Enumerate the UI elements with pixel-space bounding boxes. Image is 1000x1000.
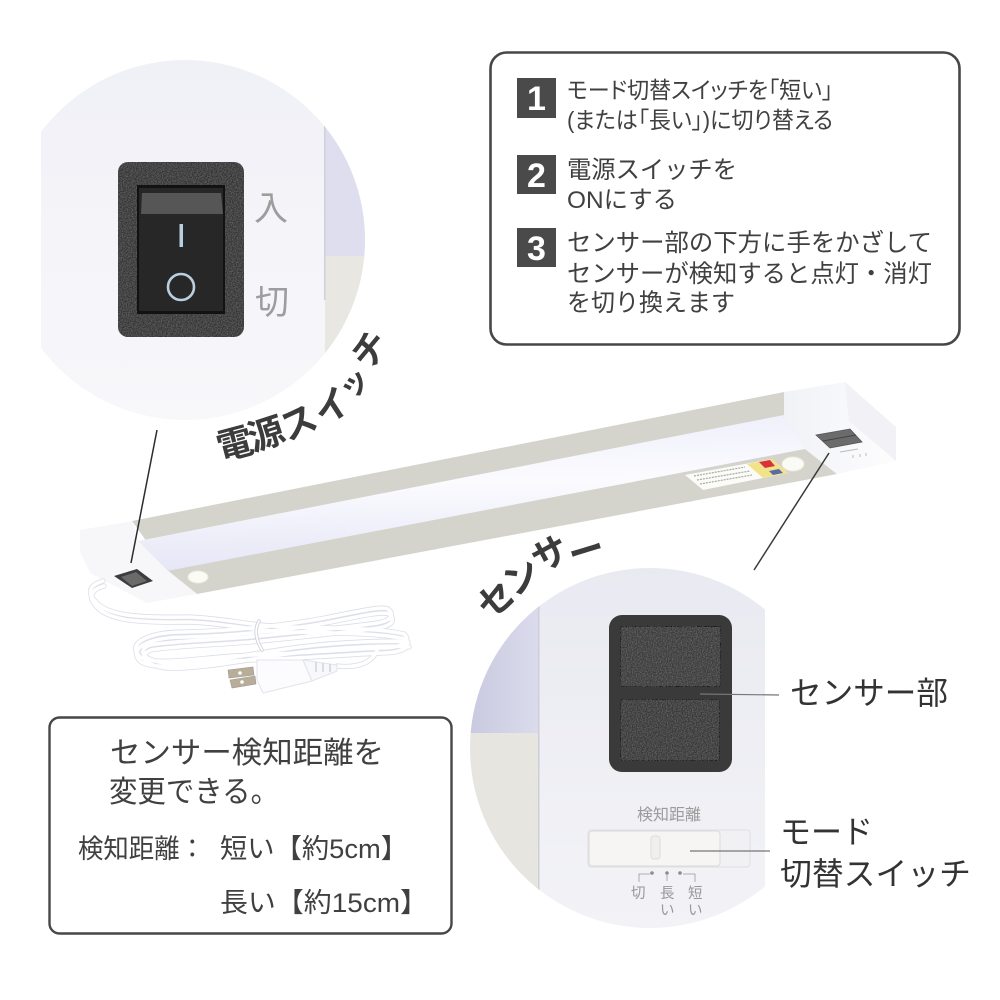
step 2 text: 電源スイッチを xyxy=(567,156,737,184)
bar diffuser xyxy=(138,415,805,571)
bar left end cap xyxy=(80,521,197,603)
heading: power switch, arched: 電 xyxy=(212,419,257,468)
step 1 text xyxy=(567,77,833,133)
heading: power switch, arched xyxy=(212,323,398,468)
LED bar light product xyxy=(80,382,896,693)
switch label: on: 入 xyxy=(254,190,288,228)
label: sensor part: センサー部 xyxy=(790,675,948,711)
panel: detection distance note xyxy=(50,718,452,934)
panel: operating steps xyxy=(490,52,960,344)
leader line: mode switch xyxy=(690,850,770,852)
mode position markers: い xyxy=(660,903,674,919)
sensor plate label: detection distance: 検知距離 xyxy=(637,806,701,824)
note heading xyxy=(109,737,384,809)
heading: power switch, arched: チ xyxy=(343,323,398,377)
heading: sensor, arched xyxy=(469,526,610,627)
step 1 text: (または「長い」)に切り替える xyxy=(567,107,833,133)
icon: sensor unit xyxy=(609,615,732,772)
step 3 text: センサー部の下方に手をかざして xyxy=(567,228,932,257)
panel: switch close-up circle xyxy=(41,60,365,380)
step 2 badge: 2 xyxy=(527,157,546,195)
leader line: sensor xyxy=(754,453,829,570)
step 1 badge xyxy=(517,78,556,118)
short distance row: 検知距離： xyxy=(78,834,205,864)
heading: sensor, arched: ー xyxy=(563,526,610,576)
bar silver body xyxy=(132,392,837,594)
short distance row xyxy=(78,834,408,864)
label: mode changeover switch: モード xyxy=(780,814,873,850)
label: mode changeover switch xyxy=(780,814,971,892)
switch label: off: 切 xyxy=(255,284,289,322)
heading: power switch, arched: ッ xyxy=(332,362,377,406)
step 2 badge xyxy=(517,155,556,195)
step 3 badge xyxy=(517,228,556,268)
heading: power switch, arched: ス xyxy=(274,396,324,449)
step 3 badge: 3 xyxy=(527,230,546,268)
note heading: 変更できる。 xyxy=(109,776,279,809)
heading: sensor, arched: サ xyxy=(525,527,576,581)
step 3 text xyxy=(567,228,932,317)
step 1 badge: 1 xyxy=(527,80,546,118)
heading: sensor, arched: セ xyxy=(469,572,523,627)
small sensor on bar xyxy=(816,429,866,458)
mode slide switch xyxy=(588,830,750,867)
power cord coil xyxy=(90,581,409,668)
leader line: sensor part xyxy=(700,694,779,695)
right sensor window xyxy=(782,457,804,471)
step 3 text: を切り換えます xyxy=(567,289,735,317)
short distance row: 短い【約5cm】 xyxy=(220,834,408,864)
heading: power switch, arched: 源 xyxy=(243,409,290,459)
left sensor window xyxy=(188,571,208,583)
mode position markers: 短 xyxy=(688,885,702,902)
long distance row: 長い【約15cm】 xyxy=(220,888,428,918)
icon: rocker switch xyxy=(118,162,244,337)
mode position markers: い xyxy=(688,903,702,919)
panel: sensor close-up circle xyxy=(465,560,765,935)
bar right end cap xyxy=(784,382,896,474)
mode position markers: 長 xyxy=(660,886,674,902)
heading: sensor, arched: ン xyxy=(495,550,548,604)
warning sticker xyxy=(685,459,788,490)
small power switch on bar xyxy=(114,569,153,588)
step 2 text xyxy=(567,156,737,214)
note heading: センサー検知距離を xyxy=(110,737,384,770)
step 1 text: モード切替スイッチを「短い」 xyxy=(567,77,833,103)
mode position markers: 切 xyxy=(631,885,646,902)
step 3 text: センサーが検知すると点灯・消灯 xyxy=(567,260,932,288)
power plug xyxy=(228,660,337,693)
step 2 text: ONにする xyxy=(567,187,677,214)
heading: power switch, arched: イ xyxy=(306,380,358,434)
mode position markers xyxy=(631,871,702,919)
label: mode changeover switch: 切替スイッチ xyxy=(780,856,971,892)
leader line: power switch xyxy=(131,430,157,563)
